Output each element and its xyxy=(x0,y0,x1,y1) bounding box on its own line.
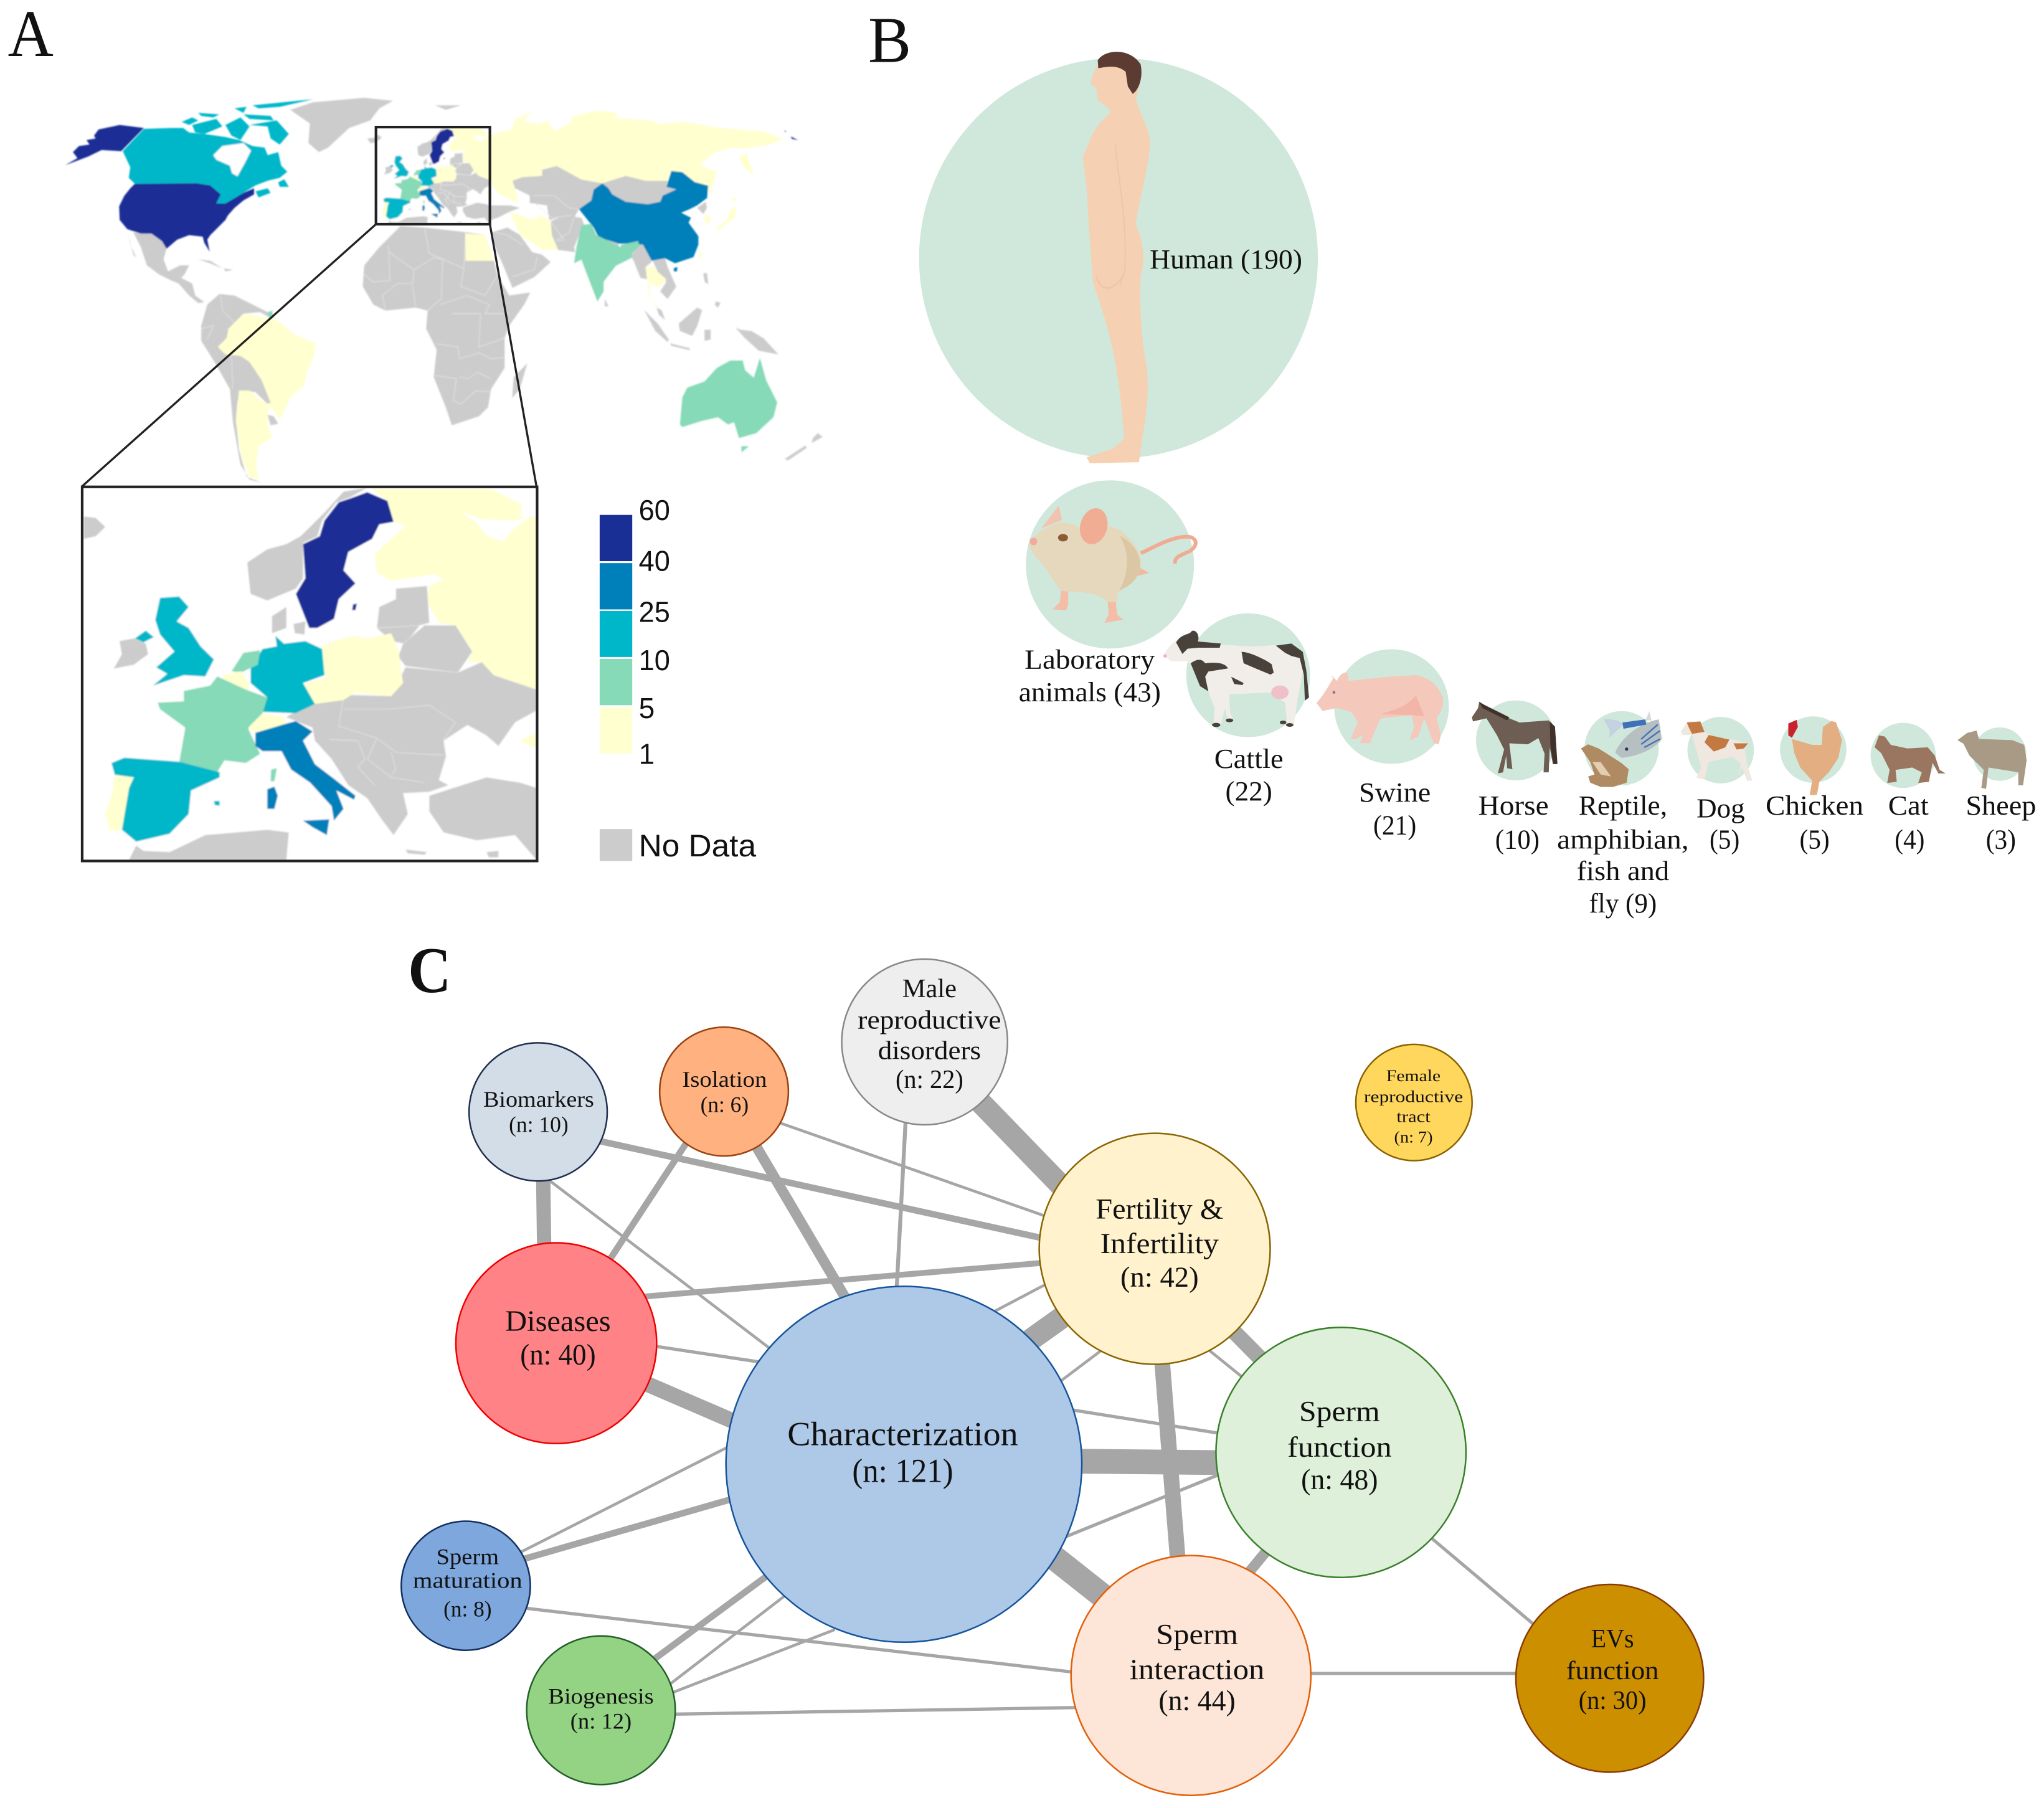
panel C: network edges xyxy=(523,1105,1533,1714)
label: dog xyxy=(1696,793,1745,855)
label: reptile, amphibian, fish and fly xyxy=(1557,790,1689,919)
icon: human figure xyxy=(1083,52,1150,463)
legend: 25 xyxy=(639,595,670,628)
node: Biogenesis: Biogenesis xyxy=(548,1684,654,1709)
label: horse: Horse xyxy=(1479,790,1549,821)
bubble: chicken xyxy=(1780,716,1847,783)
node: Sperm interaction: interaction xyxy=(1130,1654,1264,1685)
label: dog: (5) xyxy=(1710,825,1739,855)
node: EVs function: function xyxy=(1566,1657,1659,1685)
node: Sperm maturation xyxy=(401,1522,531,1650)
node: Sperm maturation: maturation xyxy=(413,1568,523,1593)
label: laboratory animals xyxy=(1019,645,1161,708)
node: Sperm interaction: Sperm xyxy=(1156,1618,1238,1650)
node: Female reproductive tract: Female xyxy=(1386,1067,1441,1085)
node: Biomarkers: (n: 10) xyxy=(509,1112,569,1137)
inset map: Europe xyxy=(82,486,537,860)
label: swine: Swine xyxy=(1359,777,1431,808)
map: Asia and Oceania xyxy=(489,111,823,460)
node: Male reproductive disorders: (n: 22) xyxy=(896,1066,963,1094)
label: sheep: Sheep xyxy=(1966,790,2036,821)
node: EVs function xyxy=(1516,1584,1703,1772)
map: Americas, Africa and Greenland xyxy=(65,98,530,483)
locator box xyxy=(376,127,490,224)
icon: mouse xyxy=(1029,505,1196,623)
node: Diseases: Diseases xyxy=(505,1305,611,1338)
node: Male reproductive disorders xyxy=(842,959,1008,1125)
label: swine xyxy=(1359,777,1431,841)
label: horse xyxy=(1479,790,1549,855)
label: horse: (10) xyxy=(1495,825,1540,855)
node: Female reproductive tract: (n: 7) xyxy=(1394,1129,1433,1147)
bubble: sheep xyxy=(1973,727,2027,781)
node: Biogenesis: (n: 12) xyxy=(570,1708,632,1733)
zoom connector lines xyxy=(82,224,536,486)
node: EVs function: EVs xyxy=(1591,1625,1634,1654)
node: Diseases xyxy=(456,1242,656,1444)
panel label B: B xyxy=(868,4,911,76)
label: reptile, amphibian, fish and fly: fish and xyxy=(1577,856,1669,886)
bubble: reptile, amphibian, fish and fly xyxy=(1584,711,1658,785)
label: reptile, amphibian, fish and fly: amphibian, xyxy=(1557,825,1689,855)
label: cattle: (22) xyxy=(1226,776,1272,807)
node: Male reproductive disorders: reproductive xyxy=(858,1006,1001,1034)
label: reptile, amphibian, fish and fly: fly (9) xyxy=(1589,888,1657,919)
legend: 60 xyxy=(639,494,670,526)
map: small Europe inside locator box xyxy=(376,127,490,224)
node: Fertility and Infertility: Infertility xyxy=(1100,1228,1219,1259)
label: sheep xyxy=(1966,790,2036,855)
legend: 40 xyxy=(639,545,670,577)
icon: cat xyxy=(1875,736,1946,783)
label: laboratory animals: Laboratory xyxy=(1024,645,1155,675)
node: Sperm function: function xyxy=(1287,1431,1392,1463)
icon: dog xyxy=(1680,721,1753,780)
icon: horse xyxy=(1472,702,1558,774)
label: chicken: Chicken xyxy=(1766,790,1863,821)
icon: chicken xyxy=(1788,720,1842,795)
node: Fertility and Infertility xyxy=(1039,1134,1270,1365)
node: Female reproductive tract xyxy=(1356,1044,1472,1161)
node: Female reproductive tract: tract xyxy=(1396,1108,1431,1126)
node: Sperm interaction xyxy=(1071,1556,1311,1796)
label: swine: (21) xyxy=(1373,810,1416,841)
legend xyxy=(600,494,756,863)
node: Sperm function xyxy=(1216,1327,1466,1578)
label: laboratory animals: animals (43) xyxy=(1019,677,1161,708)
icon: cow xyxy=(1163,631,1309,727)
icon: pig xyxy=(1317,673,1443,744)
node: Biomarkers xyxy=(469,1043,607,1181)
panel B: species bubbles xyxy=(919,52,2036,919)
label: cat: Cat xyxy=(1888,790,1929,821)
node: Characterization xyxy=(726,1286,1082,1642)
legend: 1 xyxy=(639,738,655,770)
node: Male reproductive disorders: disorders xyxy=(878,1037,981,1066)
node: Sperm function: (n: 48) xyxy=(1301,1464,1378,1495)
node: Female reproductive tract: reproductive xyxy=(1364,1088,1463,1106)
node: EVs function: (n: 30) xyxy=(1579,1687,1647,1715)
node: Isolation: Isolation xyxy=(682,1067,767,1092)
label: dog: Dog xyxy=(1696,793,1745,823)
node: Sperm maturation: Sperm xyxy=(437,1545,499,1569)
node: Biomarkers: Biomarkers xyxy=(483,1087,594,1112)
label: cattle xyxy=(1214,744,1284,807)
bubble: swine xyxy=(1334,649,1449,764)
bubble: dog xyxy=(1687,717,1754,783)
node: Fertility and Infertility: (n: 42) xyxy=(1120,1261,1199,1293)
legend: 10 xyxy=(639,644,670,676)
bubble: cat xyxy=(1871,723,1936,788)
node: Isolation: (n: 6) xyxy=(701,1092,749,1117)
label: sheep: (3) xyxy=(1986,825,2016,855)
legend: No Data xyxy=(639,828,756,863)
label: chicken: (5) xyxy=(1799,825,1830,855)
node: Characterization: (n: 121) xyxy=(852,1452,953,1490)
bubble: human xyxy=(919,58,1318,458)
bubble: horse xyxy=(1476,701,1556,780)
label: cat: (4) xyxy=(1895,825,1924,855)
icon: sheep xyxy=(1957,731,2027,789)
node: Sperm maturation: (n: 8) xyxy=(443,1596,492,1621)
label: human: Human (190) xyxy=(1150,244,1302,275)
node: Male reproductive disorders: Male xyxy=(902,975,957,1003)
node: Sperm function: Sperm xyxy=(1299,1395,1380,1427)
inset frame xyxy=(82,487,537,861)
label: cattle: Cattle xyxy=(1214,744,1284,774)
node: Fertility and Infertility: Fertility & xyxy=(1095,1193,1223,1224)
panel A: world map xyxy=(65,98,823,483)
bubble: cattle xyxy=(1186,613,1310,737)
bubble: laboratory animals xyxy=(1026,480,1194,648)
node: Diseases: (n: 40) xyxy=(520,1338,596,1371)
node: Isolation xyxy=(660,1027,788,1156)
node: Characterization: Characterization xyxy=(787,1415,1018,1452)
label: reptile, amphibian, fish and fly: Reptile, xyxy=(1579,790,1667,821)
node: Biogenesis xyxy=(527,1636,675,1784)
label: chicken xyxy=(1766,790,1863,855)
node: Sperm interaction: (n: 44) xyxy=(1158,1685,1236,1716)
legend: 5 xyxy=(639,692,655,724)
label: cat xyxy=(1888,790,1929,855)
icon: fish and frog xyxy=(1581,711,1662,787)
panel label C: C xyxy=(408,934,451,1006)
